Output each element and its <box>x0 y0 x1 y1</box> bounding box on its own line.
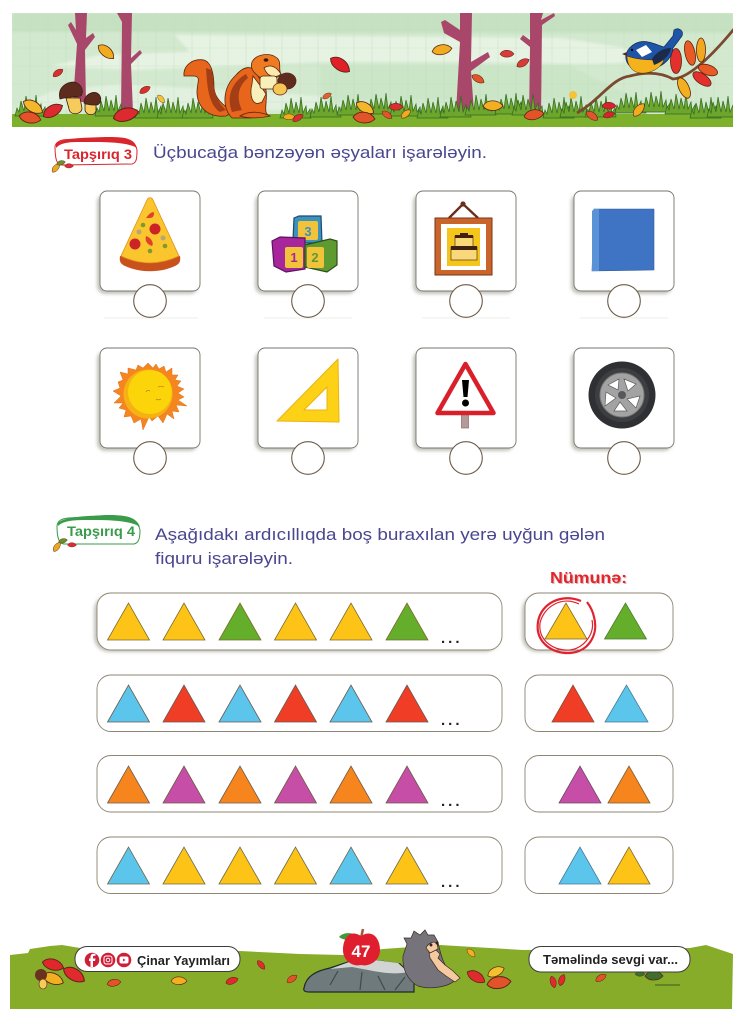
pill: slogan <box>529 946 690 972</box>
falling and ground leaves <box>18 42 647 125</box>
footer: green ground <box>10 945 733 1009</box>
grass tufts <box>15 91 738 118</box>
card: framed picture <box>413 191 516 318</box>
card: toy blocks: 3 <box>304 224 312 239</box>
answer box row 1 (example) <box>522 593 673 653</box>
sequence row 3 <box>97 756 502 812</box>
card: warning sign <box>413 348 516 451</box>
sequence row 1: ... <box>441 630 463 647</box>
answer box row 4 <box>525 837 673 894</box>
check circles row 2 <box>134 442 640 474</box>
instruction: task 4: Aşağıdakı ardıcıllıqda boş buraxılan yerə uyğun gələn <box>155 525 605 544</box>
card: book <box>571 191 674 318</box>
tree trunks <box>68 13 555 118</box>
banner: autumn forest scene <box>12 13 738 127</box>
card: toy blocks: 1 <box>290 250 298 265</box>
instruction: task 3: Üçbucağa bənzəyən əşyaları işarələyin. <box>153 143 487 162</box>
answer box row 3 <box>525 756 673 812</box>
pill: slogan: Təməlində sevgi var... <box>543 953 678 967</box>
badge: Tapşırıq 3 <box>50 137 137 174</box>
badge: Tapşırıq 3: Tapşırıq 3 <box>64 147 133 162</box>
card: set square <box>255 348 358 451</box>
footer leaves <box>35 947 680 990</box>
pill: publisher <box>75 946 240 972</box>
sequence row 2 <box>97 675 502 732</box>
sequence row 4 <box>97 837 502 894</box>
social icons <box>85 953 131 967</box>
sequence row 2: ... <box>441 712 463 729</box>
sequence row 3: ... <box>441 793 463 810</box>
apple page number <box>339 929 380 965</box>
card: toy blocks: 2 <box>311 250 319 265</box>
example label: Nümunə: <box>551 571 628 588</box>
answer cards <box>97 191 674 474</box>
grass ground <box>12 114 733 127</box>
card: pizza <box>97 191 200 318</box>
pill: publisher: Çinar Yayımları <box>137 954 230 968</box>
rock <box>304 958 414 992</box>
card: toy blocks <box>255 191 358 318</box>
badge: Tapşırıq 4 <box>51 515 140 553</box>
instruction: task 4: fiquru işarələyin. <box>155 549 293 568</box>
squirrel <box>184 55 296 118</box>
branch with bird <box>577 29 734 113</box>
instruction: task 4 <box>155 525 605 568</box>
mushrooms <box>59 82 101 115</box>
sequence row 4: ... <box>441 874 463 891</box>
check circles row 1 <box>134 285 640 317</box>
apple page number: 47 <box>352 942 370 961</box>
badge: Tapşırıq 4: Tapşırıq 4 <box>67 524 136 539</box>
card: sun <box>97 348 200 451</box>
sequence row 1 <box>94 593 502 652</box>
card: tire <box>571 348 674 451</box>
hedgehog <box>403 930 460 988</box>
answer box row 2 <box>525 675 673 732</box>
example label: Nümunə: <box>550 570 627 587</box>
